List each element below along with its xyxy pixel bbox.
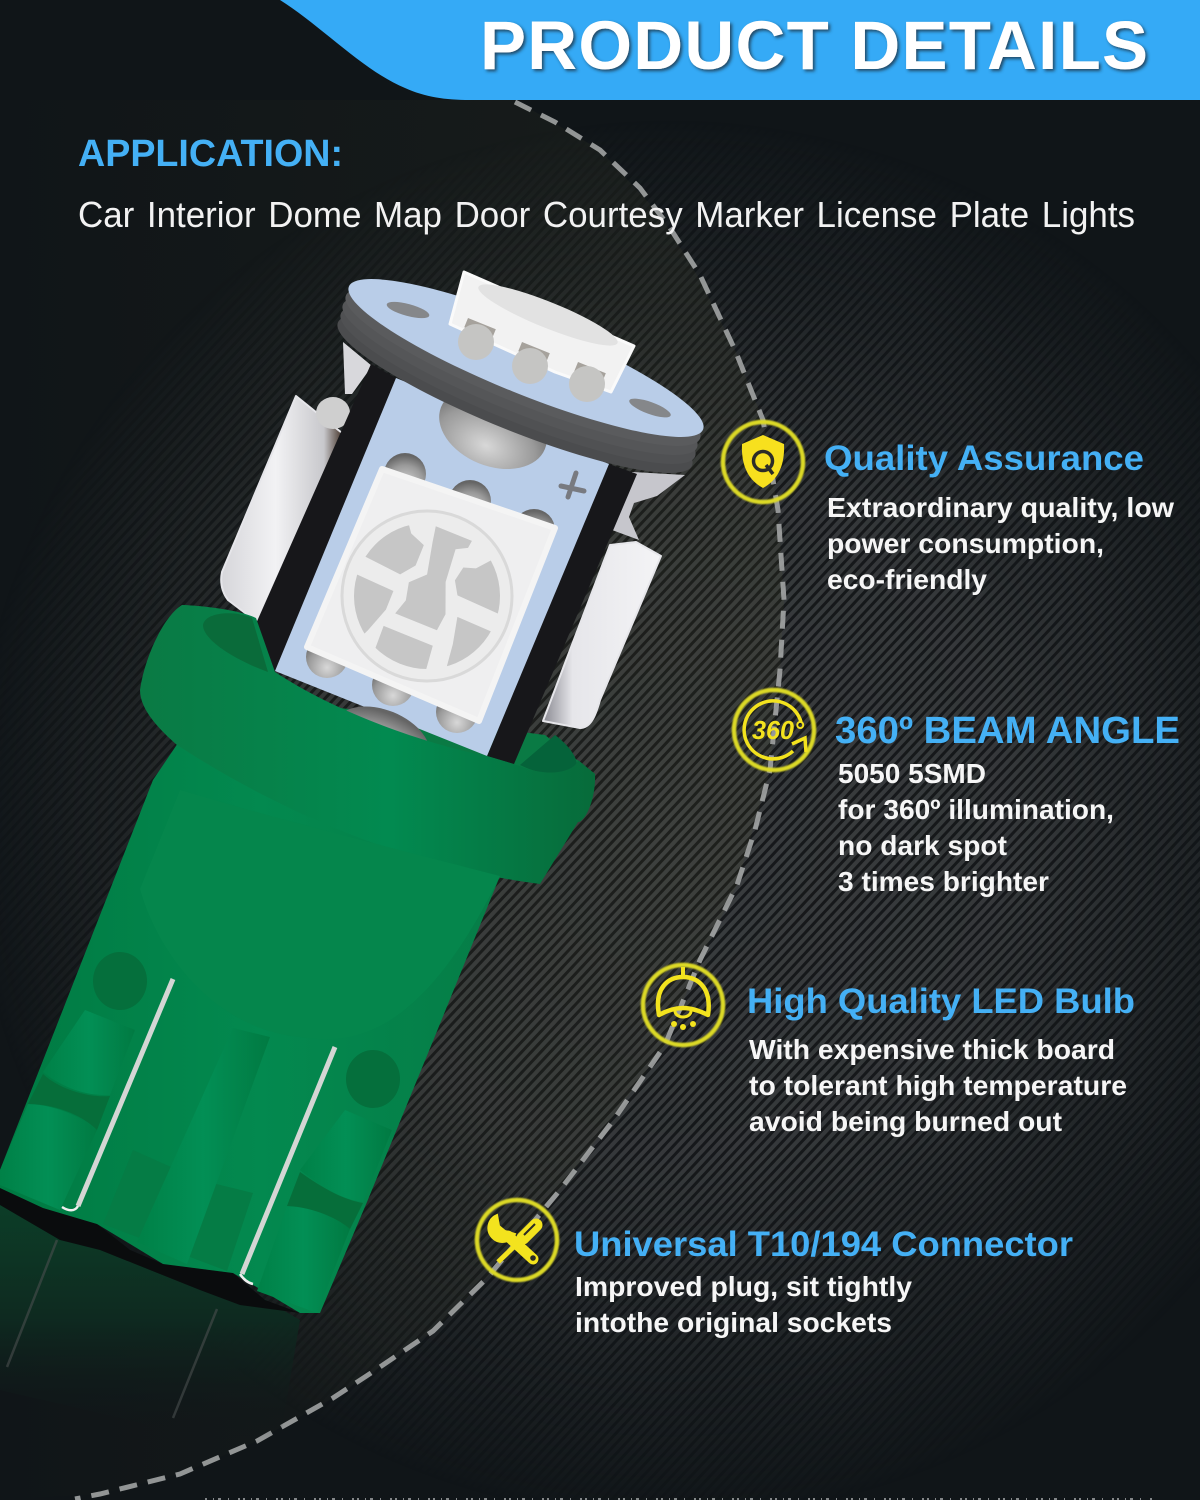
- title: PRODUCT DETAILS: [480, 7, 1148, 84]
- center LED chip: [307, 469, 555, 721]
- header banner: [280, 0, 1200, 100]
- connector details: [0, 790, 500, 1313]
- description: for 360º illumination,: [838, 794, 1114, 825]
- neck pieces: [343, 342, 372, 394]
- bulb illustration: [0, 253, 717, 1313]
- side LED right: [543, 542, 661, 728]
- icon: 360: [734, 690, 814, 770]
- description: [827, 492, 1174, 595]
- pcb board: [275, 378, 609, 756]
- feature: beam angle: [734, 690, 1180, 897]
- description: 3 times brighter: [838, 866, 1049, 897]
- heading: Quality Assurance: [824, 439, 1144, 478]
- application text: Car Interior Dome Map Door Courtesy Marker License Plate Lights: [78, 194, 1135, 235]
- icon: shield: [723, 422, 803, 502]
- solder left: [316, 397, 350, 429]
- top disc: [324, 253, 717, 499]
- description: no dark spot: [838, 830, 1007, 861]
- description: Extraordinary quality, low: [827, 492, 1174, 523]
- bulb body: [0, 740, 520, 1313]
- heading: Universal T10/194 Connector: [574, 1225, 1073, 1264]
- description: to tolerant high temperature: [749, 1070, 1127, 1101]
- heading: 360º BEAM ANGLE: [835, 710, 1180, 752]
- large solder domes: [427, 372, 559, 484]
- feature: quality assurance: [723, 422, 1174, 595]
- front collar: [140, 605, 595, 884]
- description: [838, 758, 1114, 897]
- shade bands: [28, 1074, 363, 1229]
- collar inner shadows: [203, 614, 577, 774]
- icon: 360: 360°: [752, 715, 805, 745]
- description: [575, 1271, 912, 1338]
- description: intothe original sockets: [575, 1307, 892, 1338]
- icon: tools: [477, 1200, 557, 1280]
- reflection of bulb: [0, 1188, 300, 1440]
- dashed arc: [75, 102, 784, 1499]
- description: eco-friendly: [827, 564, 987, 595]
- heading: High Quality LED Bulb: [747, 982, 1135, 1021]
- description: avoid being burned out: [749, 1106, 1062, 1137]
- feature: LED bulb: [643, 965, 1135, 1137]
- dome: [140, 790, 500, 1039]
- plus mark: [561, 473, 584, 497]
- small solder bumps: [306, 453, 555, 733]
- description: 5050 5SMD: [838, 758, 986, 789]
- description: With expensive thick board: [749, 1034, 1115, 1065]
- pins: [78, 979, 173, 1206]
- wires: [243, 364, 637, 764]
- top LED: [450, 272, 634, 402]
- icon: lamp: [643, 965, 723, 1045]
- description: Improved plug, sit tightly: [575, 1271, 912, 1302]
- collar back rim: [180, 605, 595, 840]
- feature: connector: [477, 1200, 1073, 1338]
- side LED left: [221, 396, 342, 622]
- description: power consumption,: [827, 528, 1104, 559]
- application heading: APPLICATION:: [78, 133, 343, 175]
- description: [749, 1034, 1127, 1137]
